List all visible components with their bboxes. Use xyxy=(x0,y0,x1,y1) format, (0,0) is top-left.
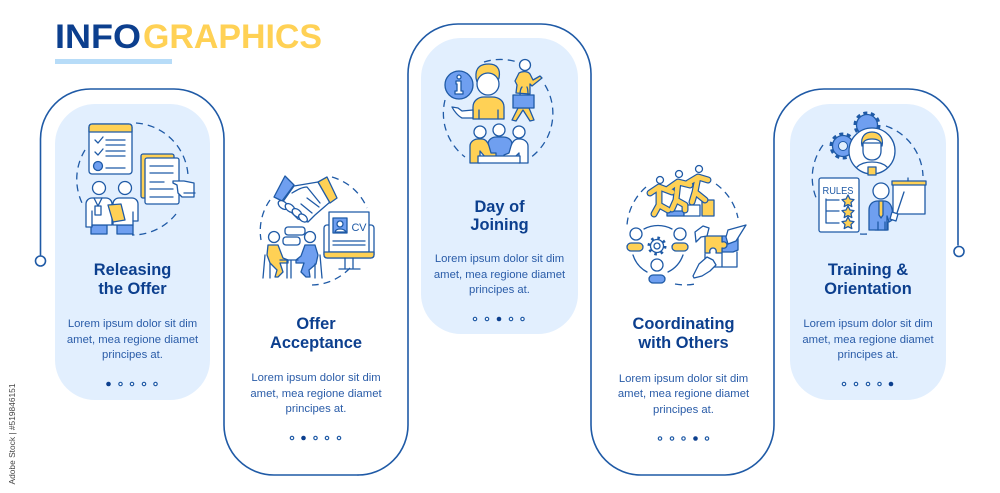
body text: Lorem ipsum dolor sit dim xyxy=(619,373,748,385)
icon: teamwork and puzzle xyxy=(627,166,746,285)
body text: principes at. xyxy=(286,403,346,415)
heading: with Others xyxy=(637,334,729,352)
icon: training and rules: RULES xyxy=(822,185,854,197)
heading: Training & xyxy=(828,261,908,279)
body text: principes at. xyxy=(653,404,714,416)
panel: offer acceptance xyxy=(250,176,382,440)
body text: amet, mea regione diamet xyxy=(67,334,199,346)
body text: principes at. xyxy=(838,349,898,361)
icon: offer documents and people xyxy=(77,123,195,235)
heading: Coordinating xyxy=(633,315,734,333)
title xyxy=(55,18,322,64)
pagination dots xyxy=(106,382,157,386)
heading: Offer xyxy=(296,315,336,333)
title: INFO xyxy=(55,18,141,56)
heading: Releasing xyxy=(94,261,171,279)
body text: amet, mea regione diamet xyxy=(250,388,382,400)
heading: Orientation xyxy=(824,280,912,298)
heading: Joining xyxy=(470,216,529,234)
stock id note: Adobe Stock | #519846151 xyxy=(7,383,17,484)
body text: Lorem ipsum dolor sit dim xyxy=(68,318,197,330)
body text: Lorem ipsum dolor sit dim xyxy=(435,253,564,265)
body text: Lorem ipsum dolor sit dim xyxy=(803,318,933,330)
panel: releasing the offer xyxy=(55,104,210,400)
body text: Lorem ipsum dolor sit dim xyxy=(251,372,381,384)
heading: Day of xyxy=(474,198,525,216)
icon: handshake, meeting and CV: CV xyxy=(352,222,367,234)
heading: the Offer xyxy=(98,280,167,298)
panel: coordinating with others xyxy=(618,166,750,441)
pagination dots xyxy=(473,317,524,321)
body text: principes at. xyxy=(102,349,163,361)
body text: amet, mea regione diamet xyxy=(618,388,750,400)
panel: day of joining xyxy=(421,38,578,334)
body text: principes at. xyxy=(469,284,530,296)
icon: new hire welcome xyxy=(443,59,553,163)
icon: handshake, meeting and CV xyxy=(260,176,374,285)
heading: Acceptance xyxy=(270,334,362,352)
title: GRAPHICS xyxy=(143,18,322,56)
pagination dots xyxy=(290,436,341,440)
icon: training and rules xyxy=(812,113,926,234)
body text: amet, mea regione diamet xyxy=(434,269,566,281)
body text: amet, mea regione diamet xyxy=(802,334,934,346)
pagination dots xyxy=(658,436,709,441)
panel: training and orientation xyxy=(790,104,946,400)
pagination dots xyxy=(842,382,893,386)
